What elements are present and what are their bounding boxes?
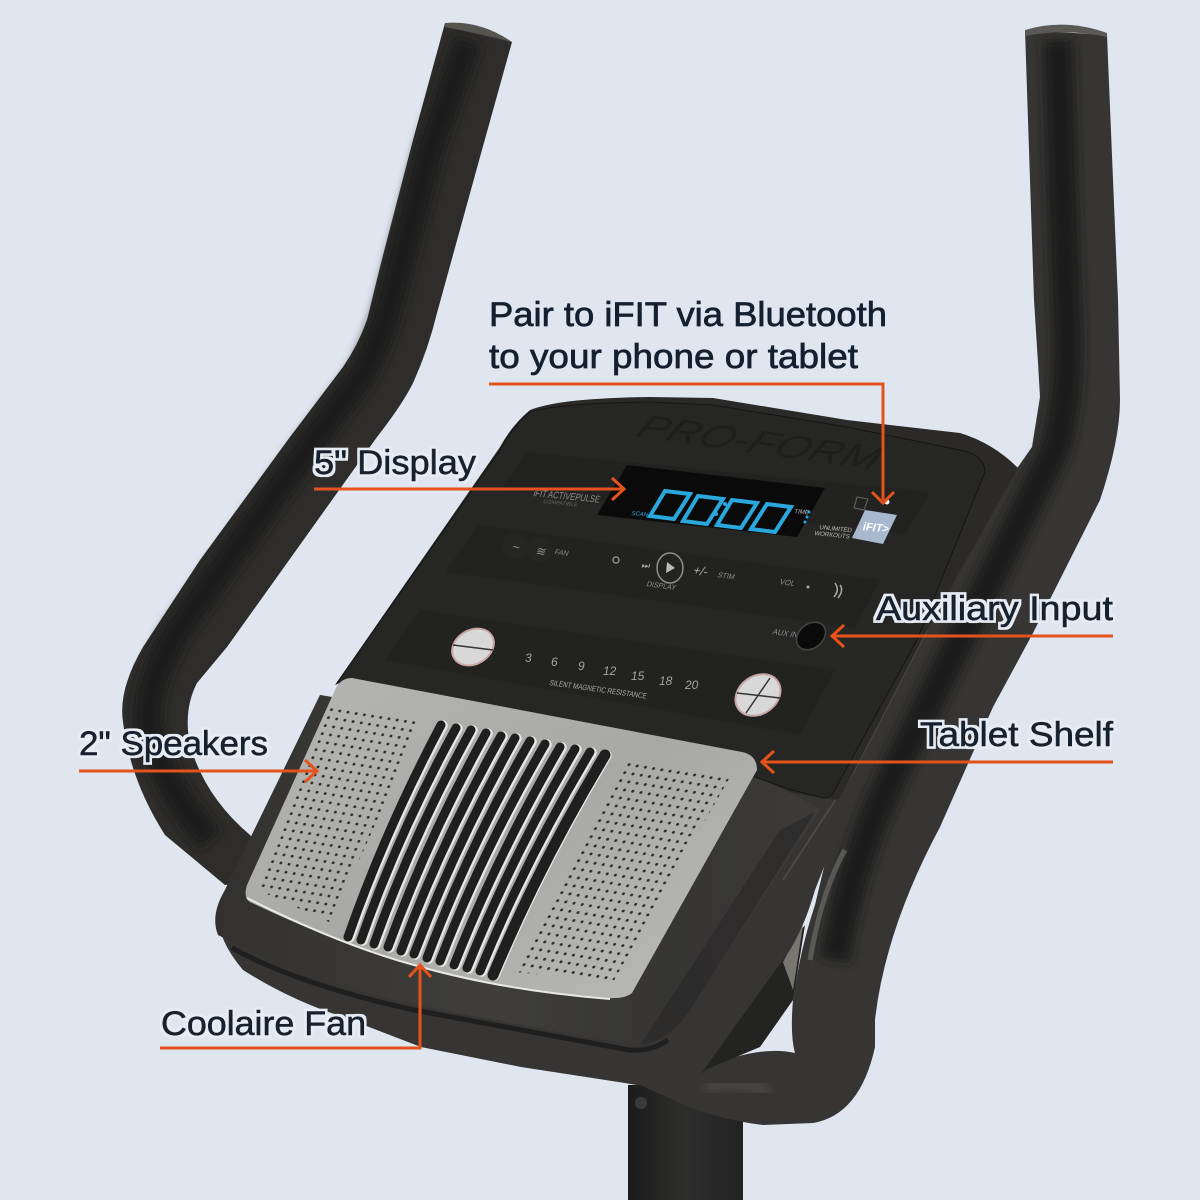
fan and playback controls: FAN	[553, 547, 570, 558]
bluetooth indicator	[884, 500, 890, 504]
right handlebar	[640, 25, 1120, 1125]
fan and playback controls: +/-	[691, 563, 711, 579]
iFIT badge: iFIT>	[861, 521, 891, 536]
iFIT badge: WORKOUTS	[813, 530, 851, 540]
callout: fan	[160, 965, 431, 1048]
callout: fan: Coolaire Fan	[161, 1005, 366, 1043]
display screen	[597, 465, 825, 537]
resistance numbers: 12	[603, 664, 617, 678]
compatible label: COMPATIBLE	[542, 499, 579, 508]
left speaker perforations	[258, 705, 422, 923]
resistance numbers: 15	[631, 669, 645, 683]
right speaker perforations	[516, 760, 730, 982]
fan and playback controls	[502, 533, 842, 598]
dark button bands	[385, 452, 930, 735]
activepulse label: iFIT ACTIVEPULSE	[532, 488, 602, 506]
tray face	[215, 695, 820, 1045]
callout: auxiliary input	[832, 590, 1114, 647]
resistance numbers: 3	[525, 651, 532, 665]
callout: tablet shelf	[762, 716, 1114, 773]
silver speaker plate	[246, 678, 757, 999]
grey bracket piece	[783, 925, 803, 990]
minus button	[445, 621, 501, 673]
resistance caption: SILENT MAGNETIC RESISTANCE	[548, 678, 648, 701]
callout: display	[314, 444, 624, 500]
fan and playback controls: ⏭	[640, 560, 651, 571]
right handlebar end cap	[1025, 25, 1107, 37]
console face	[335, 397, 1018, 800]
callout: speakers	[79, 725, 317, 782]
rim along console side	[783, 630, 927, 880]
left handlebar end cap	[445, 23, 512, 42]
tablet icon	[854, 497, 868, 510]
console rear shell	[218, 695, 900, 1086]
fan and playback controls: STIM	[716, 570, 736, 581]
plus button	[727, 666, 789, 724]
fan and playback controls: ~	[510, 539, 522, 555]
callout: speakers: 2" Speakers	[79, 725, 268, 763]
left handlebar	[122, 23, 512, 885]
resistance controls	[445, 621, 789, 724]
brand watermark: PRO-FORM	[630, 409, 889, 477]
bracket behind console	[700, 925, 805, 1075]
time label: TIME	[793, 508, 810, 516]
resistance numbers: 20	[684, 678, 699, 692]
control panel	[337, 402, 985, 798]
iFIT badge	[813, 497, 897, 544]
status dots	[804, 510, 810, 524]
digits	[650, 491, 791, 532]
post	[628, 1085, 743, 1200]
callout: Bluetooth: Pair to iFIT via Bluetooth	[489, 296, 887, 334]
scan label: SCAN	[630, 510, 649, 519]
fan and playback controls: DISPLAY	[645, 579, 678, 592]
fan grille	[348, 725, 606, 976]
tray groove	[232, 948, 668, 1050]
resistance numbers	[525, 651, 699, 692]
callout: display: 5" Display	[314, 444, 476, 482]
callout: Bluetooth	[489, 296, 894, 503]
callout: tablet shelf: Tablet Shelf	[920, 716, 1114, 754]
tray side shadow	[640, 812, 815, 1045]
post screw	[635, 1097, 647, 1109]
fan and playback controls: VOL	[778, 577, 797, 588]
callout: auxiliary input: Auxiliary Input	[876, 590, 1114, 628]
aux input jack: AUX IN	[771, 627, 800, 639]
fan and playback controls: ≋	[534, 544, 548, 559]
callout: Bluetooth: to your phone or tablet	[489, 338, 859, 376]
unlimited workouts text: UNLIMITED	[818, 524, 853, 534]
resistance numbers: 6	[551, 655, 558, 669]
aux input jack	[771, 617, 831, 655]
colon	[714, 502, 727, 516]
resistance numbers: 9	[578, 659, 585, 673]
resistance numbers: 18	[659, 674, 673, 688]
